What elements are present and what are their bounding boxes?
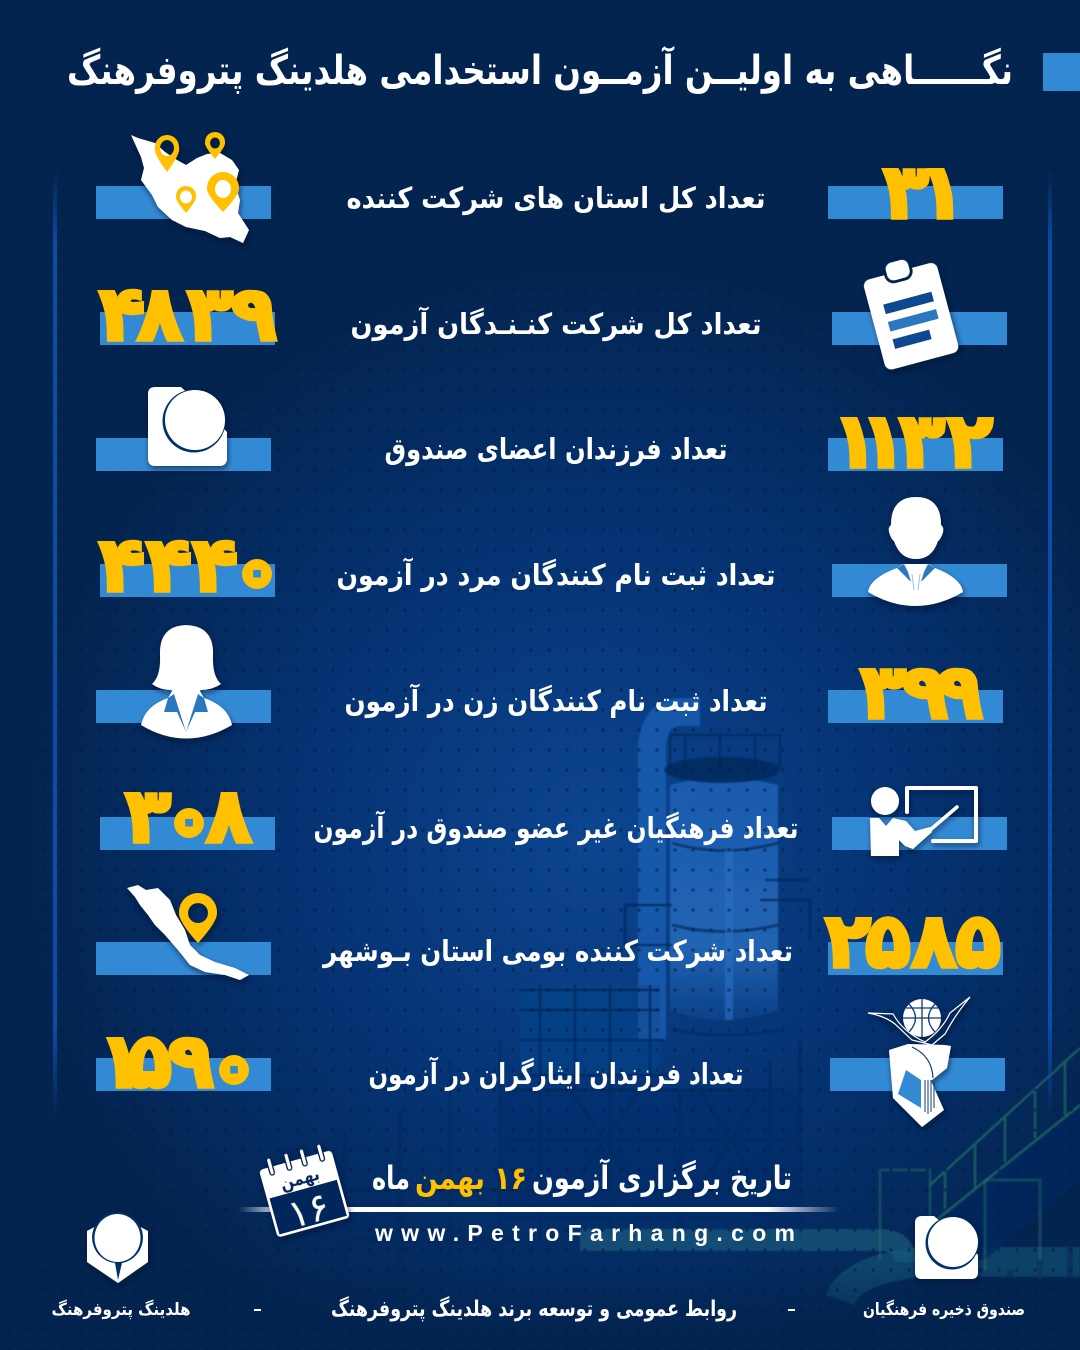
number 4839: ۴۸۳۹ <box>99 269 277 358</box>
row 2: participants <box>99 250 1007 371</box>
number 308 <box>125 771 252 860</box>
bar left <box>100 312 275 345</box>
number 308: ۰ <box>176 795 202 846</box>
row 3: fund members' children <box>96 387 1003 485</box>
footer: separator left <box>254 1309 261 1311</box>
row 8: veterans' children <box>96 997 1005 1127</box>
header accent square <box>1043 53 1080 91</box>
bar left <box>96 438 271 471</box>
row 1: provinces <box>96 132 1003 243</box>
number 31: ۳۱ <box>883 147 965 236</box>
number 1590: ۱۵۹ <box>98 1016 214 1105</box>
faint left scaffold near date <box>345 1040 520 1290</box>
pipes <box>580 1240 905 1262</box>
row 7: Bushehr locals <box>96 885 1003 985</box>
bar right <box>832 817 1007 850</box>
icon: clipboard <box>859 250 960 371</box>
column body <box>670 778 778 1020</box>
bar left <box>96 186 271 219</box>
icon: iran map with pins <box>131 132 249 243</box>
truss <box>505 1040 800 1240</box>
label: participants: تعداد کل شرکت کنـنـدگان آزمون <box>350 306 762 341</box>
label: fund members' children: تعداد فرزندان اعضای صندوق <box>384 432 728 466</box>
bar left <box>96 942 271 975</box>
logo: holding <box>87 1212 148 1283</box>
logo: fund <box>915 1216 978 1279</box>
row 4: male registrants <box>99 497 1007 609</box>
bar right <box>828 438 1003 471</box>
footer: PR department: روابط عمومی و توسعه برند هلدینگ پتروفرهنگ <box>331 1295 737 1322</box>
number 399: ۳۹۹ <box>860 647 983 736</box>
icon: man <box>868 497 963 606</box>
website url: www.PetroFarhang.com <box>374 1220 795 1246</box>
date heading <box>372 1158 792 1197</box>
footer: fund name: صندوق ذخیره فرهنگیان <box>863 1299 1025 1320</box>
number 1132: ۱۱۳۲ <box>832 396 993 485</box>
label: female registrants: تعداد ثبت نام کنندگان زن در آزمون <box>344 683 768 718</box>
side pipe <box>652 712 700 1040</box>
bar right <box>828 186 1003 219</box>
icon: fund logo <box>148 387 227 466</box>
side line left <box>53 170 57 1120</box>
side line right <box>1048 170 1052 1120</box>
bar right <box>832 312 1007 345</box>
footer: holding name: هلدینگ پتروفرهنگ <box>52 1299 190 1320</box>
label: male registrants: تعداد ثبت نام کنندگان مرد در آزمون <box>336 557 776 592</box>
icon: farhangian emblem <box>868 997 970 1127</box>
date heading: تاریخ برگزاری آزمون <box>532 1158 792 1197</box>
date heading: ۱۶ بهمن <box>415 1159 527 1197</box>
label: provinces: تعداد کل استان های شرکت کننده <box>346 181 766 215</box>
platform <box>664 757 780 783</box>
bar left <box>96 1058 271 1091</box>
icon: Bushehr map with pin <box>127 885 249 980</box>
bar left <box>100 564 275 597</box>
footer: separator right <box>788 1309 795 1311</box>
number 4440: ۰ <box>244 546 270 597</box>
bar right <box>828 690 1003 723</box>
bar right <box>830 1058 1005 1091</box>
number 308: ۳ <box>125 771 171 860</box>
icon: teacher at board <box>870 787 976 856</box>
icon: calendar: بهمن <box>278 1164 322 1195</box>
number 4440: ۴۴۴ <box>99 520 238 609</box>
bar left <box>96 690 271 723</box>
stair deck <box>930 1105 1080 1260</box>
label: Bushehr locals: تعداد شرکت کننده بومی استان بـوشهر <box>321 934 793 968</box>
number 2585: ۲۵۸۵ <box>825 896 1001 985</box>
date rule <box>238 1207 840 1212</box>
date heading: ماه <box>372 1159 410 1197</box>
bar left <box>100 817 275 850</box>
bar right <box>828 942 1003 975</box>
row 6: non-member teachers <box>100 771 1007 860</box>
icon: calendar <box>257 1143 351 1241</box>
bar right <box>832 564 1007 597</box>
number 1590: ۰ <box>221 1042 247 1093</box>
row 5: female registrants <box>96 625 1003 738</box>
label: non-member teachers: تعداد فرهنگیان غیر عضو صندوق در آزمون <box>314 810 798 845</box>
scaffold block <box>520 985 660 1075</box>
icon: calendar: ۱۶ <box>283 1184 334 1237</box>
number 308: ۸ <box>206 771 252 860</box>
icon: woman <box>141 625 232 738</box>
label: veterans' children: تعداد فرزندان ایثارگران در آزمون <box>368 1056 744 1091</box>
